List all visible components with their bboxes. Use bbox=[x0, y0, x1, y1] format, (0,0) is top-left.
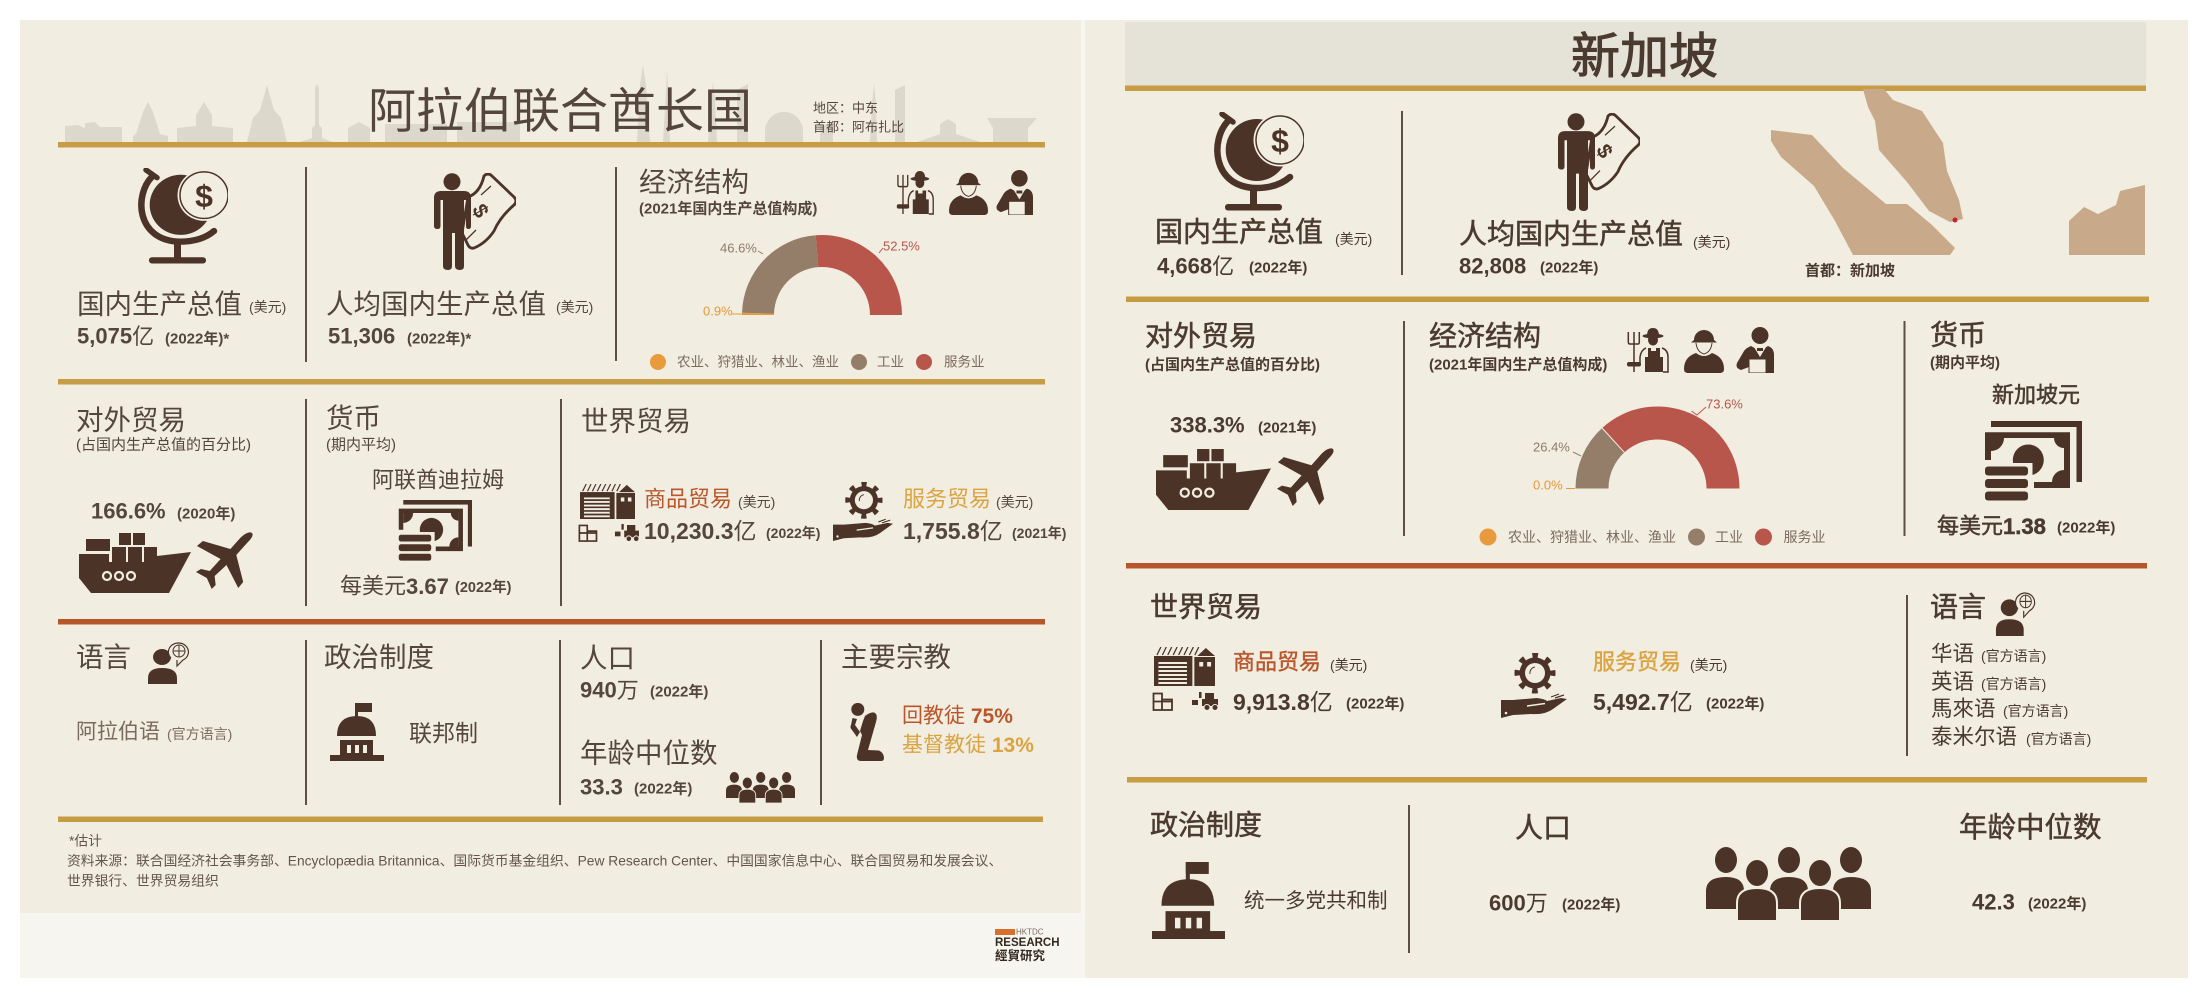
value: languages: (官方语言) bbox=[2026, 731, 2091, 747]
value: exchange rate bbox=[340, 574, 512, 598]
heading: foreign trade: (占国内生产总值的百分比) bbox=[1145, 356, 1320, 374]
footnote and sources: *估计 bbox=[69, 834, 102, 848]
title band bbox=[1125, 22, 2146, 86]
title: 阿拉伯联合酋长国 bbox=[368, 86, 752, 138]
value: GDP: (2022年)* bbox=[165, 330, 229, 348]
heading: political system: 政治制度 bbox=[324, 642, 434, 672]
map of Singapore region bbox=[1771, 89, 2145, 255]
heading: political system: 政治制度 bbox=[1150, 810, 1262, 840]
block: political system bbox=[324, 642, 478, 761]
value: GDP: (2022年) bbox=[1249, 258, 1307, 276]
heading: GDP: (美元) bbox=[1335, 231, 1372, 247]
icon: cargo ship bbox=[79, 533, 191, 593]
logo: HKTDC Research: RESEARCH bbox=[995, 937, 1060, 949]
value: median age bbox=[1972, 890, 2086, 914]
block: language bbox=[1930, 592, 2091, 749]
value: GDP bbox=[1157, 254, 1307, 278]
heading: world trade: 世界贸易 bbox=[1150, 592, 1262, 622]
icon: waiter bbox=[996, 170, 1033, 215]
services trade: (2021年) bbox=[1012, 525, 1066, 541]
services trade bbox=[1593, 650, 1764, 715]
block: language bbox=[76, 642, 232, 744]
merchandise trade bbox=[644, 486, 820, 544]
value: GDP per capita: (2022年) bbox=[1540, 258, 1598, 276]
legend: 农业、狩猎业、林业、渔业 bbox=[677, 354, 839, 370]
legend: 工业 bbox=[1715, 529, 1743, 545]
block: economic structure bbox=[1429, 320, 1826, 546]
footnote and sources: 资料来源：联合国经济社会事务部、Encyclopædia Britannica、国际货币基金组织、Pew Research Center、中国国家信息中心、联合国贸易和发展会议、 bbox=[67, 852, 1002, 868]
currency name: 阿联酋迪拉姆 bbox=[372, 468, 504, 492]
heading: world trade: 世界贸易 bbox=[581, 406, 691, 436]
heading: GDP per capita: 人均国内生产总值 bbox=[1459, 218, 1683, 250]
legend: 农业、狩猎业、林业、渔业 bbox=[1508, 529, 1676, 545]
value: foreign trade bbox=[91, 498, 235, 524]
median age: (2022年) bbox=[634, 780, 692, 798]
block: foreign trade bbox=[1145, 320, 1334, 510]
heading: currency bbox=[326, 402, 396, 454]
values: religion: 回教徒 75% bbox=[902, 704, 1013, 728]
icon: person with banknote bbox=[434, 173, 516, 270]
legend: 服务业 bbox=[944, 354, 984, 370]
merchandise trade: (美元) bbox=[1330, 657, 1367, 673]
icon: warehouse bbox=[1154, 647, 1215, 686]
block: religion bbox=[841, 642, 1034, 761]
block: political system bbox=[1150, 810, 1388, 939]
logo: HKTDC Research bbox=[995, 928, 1060, 963]
values: religion bbox=[902, 704, 1034, 756]
icon: globe with dollar coin bbox=[1217, 114, 1306, 210]
value: GDP per capita bbox=[328, 324, 471, 348]
value: languages: (官方语言) bbox=[1981, 648, 2046, 664]
semicircle chart: 0.9% bbox=[703, 304, 733, 318]
services trade: (美元) bbox=[1690, 657, 1727, 673]
heading: GDP per capita: (美元) bbox=[556, 299, 593, 315]
value: exchange rate: (2022年) bbox=[2057, 518, 2115, 536]
value: languages: 华语 bbox=[1931, 642, 1974, 666]
region and capital: 地区：中东 bbox=[813, 100, 878, 116]
value: language: (官方语言) bbox=[167, 726, 232, 742]
icon: banknotes and coins bbox=[398, 500, 472, 561]
block: population and median age bbox=[580, 642, 795, 803]
merchandise trade: (美元) bbox=[738, 494, 775, 510]
value: languages: (官方语言) bbox=[1981, 676, 2046, 692]
heading: median age: 年龄中位数 bbox=[1959, 812, 2102, 844]
heading: foreign trade: 对外贸易 bbox=[1145, 320, 1257, 352]
icon: waiter bbox=[1736, 327, 1774, 373]
heading: religion: 主要宗教 bbox=[841, 642, 951, 672]
merchandise trade: 10,230.3亿 bbox=[644, 518, 757, 544]
heading: currency: (期内平均) bbox=[326, 436, 396, 454]
services trade: 5,492.7亿 bbox=[1593, 689, 1693, 715]
icon: capitol bbox=[330, 703, 384, 761]
merchandise trade: 商品贸易 bbox=[644, 486, 732, 512]
value: foreign trade: (2020年) bbox=[177, 504, 235, 522]
icon: forklift bbox=[579, 524, 639, 542]
heading: foreign trade bbox=[1145, 320, 1320, 374]
heading: language: 语言 bbox=[76, 642, 131, 672]
block: GDP bbox=[77, 169, 286, 348]
heading: GDP: 国内生产总值 bbox=[77, 288, 242, 320]
value: languages: (官方语言) bbox=[2003, 703, 2068, 719]
region and capital bbox=[813, 100, 904, 134]
icon: banknotes and coins bbox=[1984, 421, 2082, 501]
value: GDP per capita bbox=[1459, 254, 1598, 278]
value: median age: (2022年) bbox=[2028, 894, 2086, 912]
heading: foreign trade bbox=[76, 404, 251, 454]
heading: foreign trade: (占国内生产总值的百分比) bbox=[76, 436, 251, 454]
icon: speaker bbox=[148, 643, 188, 684]
block: population bbox=[1489, 812, 1620, 916]
heading: economic structure: 经济结构 bbox=[1429, 320, 1541, 352]
value: exchange rate: 每美元3.67 bbox=[340, 574, 449, 598]
footnote and sources: 世界银行、世界贸易组织 bbox=[67, 874, 219, 888]
block: world trade bbox=[579, 406, 1066, 544]
value: languages: 泰米尔语 bbox=[1931, 725, 2017, 749]
value: languages bbox=[1931, 642, 2091, 749]
median age: 33.3 bbox=[580, 774, 623, 800]
semicircle chart: 0.0% bbox=[1533, 478, 1563, 492]
value: foreign trade: (2021年) bbox=[1258, 418, 1316, 436]
semicircle chart: 26.4% bbox=[1533, 440, 1570, 454]
block: world trade bbox=[1150, 592, 1764, 718]
panel: Singapore bbox=[1085, 20, 2188, 978]
value: exchange rate: 每美元1.38 bbox=[1937, 514, 2046, 538]
block: economic structure bbox=[639, 166, 1033, 370]
title: 新加坡 bbox=[1571, 30, 1718, 84]
value: population bbox=[1489, 890, 1620, 916]
legend: 服务业 bbox=[1784, 529, 1826, 545]
population: 人口 bbox=[580, 642, 635, 674]
values: religion: 基督教徒 13% bbox=[902, 734, 1034, 756]
block: GDP per capita bbox=[1459, 113, 1730, 279]
icon: gear and hand bbox=[833, 484, 893, 541]
icon: airplane bbox=[196, 532, 253, 589]
services trade: 服务贸易 bbox=[903, 486, 991, 512]
footnote and sources bbox=[67, 834, 1002, 888]
icon: forklift bbox=[1154, 692, 1218, 710]
logo: HKTDC Research: 經貿研究 bbox=[995, 948, 1046, 963]
semicircle chart: 73.6% bbox=[1706, 396, 1743, 412]
population bbox=[580, 642, 708, 702]
value: foreign trade bbox=[1170, 412, 1316, 438]
merchandise trade bbox=[1233, 650, 1404, 715]
services trade: (2022年) bbox=[1706, 694, 1764, 712]
region and capital: 首都：阿布扎比 bbox=[813, 120, 904, 134]
services trade: 服务贸易 bbox=[1593, 650, 1681, 674]
value: political system: 联邦制 bbox=[409, 720, 478, 746]
heading: economic structure: (2021年国内生产总值构成) bbox=[1429, 356, 1607, 374]
value: language: 阿拉伯语 bbox=[76, 720, 160, 744]
value: foreign trade: 166.6% bbox=[91, 498, 166, 524]
semicircle chart: 52.5% bbox=[883, 238, 920, 254]
median age bbox=[580, 738, 718, 800]
currency name: 新加坡元 bbox=[1992, 382, 2080, 408]
heading: currency: (期内平均) bbox=[1930, 354, 2000, 372]
heading: GDP: (美元) bbox=[249, 299, 286, 315]
value: median age: 42.3 bbox=[1972, 890, 2015, 914]
icon: people bbox=[726, 772, 795, 803]
heading: currency bbox=[1930, 320, 2000, 372]
block: GDP per capita bbox=[326, 173, 593, 348]
value: languages: 馬來语 bbox=[1931, 697, 1996, 721]
legend bbox=[1480, 528, 1826, 546]
icon: airplane bbox=[1277, 448, 1334, 506]
block: currency bbox=[1930, 320, 2115, 538]
median age: 年龄中位数 bbox=[580, 738, 718, 768]
value: GDP per capita: 82,808 bbox=[1459, 254, 1526, 278]
legend bbox=[650, 354, 984, 370]
heading: economic structure: 经济结构 bbox=[639, 166, 749, 198]
heading: GDP: 国内生产总值 bbox=[1155, 216, 1323, 248]
icon: worker bbox=[1684, 330, 1724, 373]
semicircle chart bbox=[1533, 396, 1743, 492]
merchandise trade: 9,913.8亿 bbox=[1233, 689, 1333, 715]
legend: 工业 bbox=[877, 354, 904, 370]
value: population: 600万 bbox=[1489, 890, 1548, 916]
heading: GDP per capita: 人均国内生产总值 bbox=[326, 288, 546, 320]
icon: cargo ship bbox=[1156, 449, 1271, 510]
value: GDP: 4,668亿 bbox=[1157, 254, 1234, 278]
panel: United Arab Emirates bbox=[20, 20, 1081, 978]
value: exchange rate: (2022年) bbox=[455, 578, 512, 596]
icon: capitol bbox=[1152, 862, 1225, 939]
icon: globe with dollar coin bbox=[141, 169, 230, 264]
icon: praying figure bbox=[850, 703, 884, 761]
heading: population: 人口 bbox=[1515, 812, 1571, 844]
icon: farmer bbox=[897, 171, 933, 214]
heading: economic structure bbox=[639, 166, 817, 218]
block: currency bbox=[326, 402, 512, 598]
merchandise trade: (2022年) bbox=[1346, 694, 1404, 712]
merchandise trade: (2022年) bbox=[766, 525, 820, 541]
value: exchange rate bbox=[1937, 514, 2115, 538]
heading: language: 语言 bbox=[1930, 592, 1986, 622]
icon: farmer bbox=[1627, 328, 1668, 372]
heading: currency: 货币 bbox=[1930, 320, 1986, 350]
value: GDP per capita: 51,306 bbox=[328, 324, 395, 348]
semicircle chart bbox=[703, 235, 920, 318]
value: GDP bbox=[77, 324, 229, 348]
icon: worker bbox=[949, 173, 988, 215]
semicircle chart: 46.6% bbox=[720, 240, 757, 256]
icon: warehouse bbox=[580, 484, 635, 519]
heading: currency: 货币 bbox=[326, 402, 381, 434]
block: median age bbox=[1959, 812, 2102, 914]
heading: foreign trade: 对外贸易 bbox=[76, 404, 186, 436]
services trade: (美元) bbox=[996, 494, 1033, 510]
logo: HKTDC Research: HKTDC bbox=[1016, 928, 1044, 936]
icon: speaker bbox=[1996, 593, 2035, 636]
capital label: 首都：新加坡 bbox=[1805, 262, 1895, 280]
value: GDP: 5,075亿 bbox=[77, 324, 154, 348]
heading: GDP per capita: (美元) bbox=[1693, 234, 1730, 250]
value: political system: 统一多党共和制 bbox=[1244, 890, 1388, 912]
icon: person with banknote bbox=[1558, 113, 1640, 211]
value: GDP per capita: (2022年)* bbox=[407, 330, 471, 348]
services trade: 1,755.8亿 bbox=[903, 518, 1003, 544]
merchandise trade: 商品贸易 bbox=[1233, 650, 1321, 674]
icon: gear and hand bbox=[1501, 656, 1567, 718]
block: foreign trade bbox=[76, 404, 253, 593]
heading: economic structure bbox=[1429, 320, 1607, 374]
services trade bbox=[903, 486, 1066, 544]
block: GDP bbox=[1155, 114, 1372, 278]
heading: economic structure: (2021年国内生产总值构成) bbox=[639, 200, 817, 218]
population: (2022年) bbox=[650, 682, 708, 700]
population: 940万 bbox=[580, 678, 639, 702]
city skyline bbox=[65, 65, 1037, 142]
value: language bbox=[76, 720, 232, 744]
icon: people bbox=[1706, 847, 1871, 921]
value: languages: 英语 bbox=[1931, 670, 1974, 694]
value: foreign trade: 338.3% bbox=[1170, 412, 1245, 438]
value: population: (2022年) bbox=[1562, 896, 1620, 914]
